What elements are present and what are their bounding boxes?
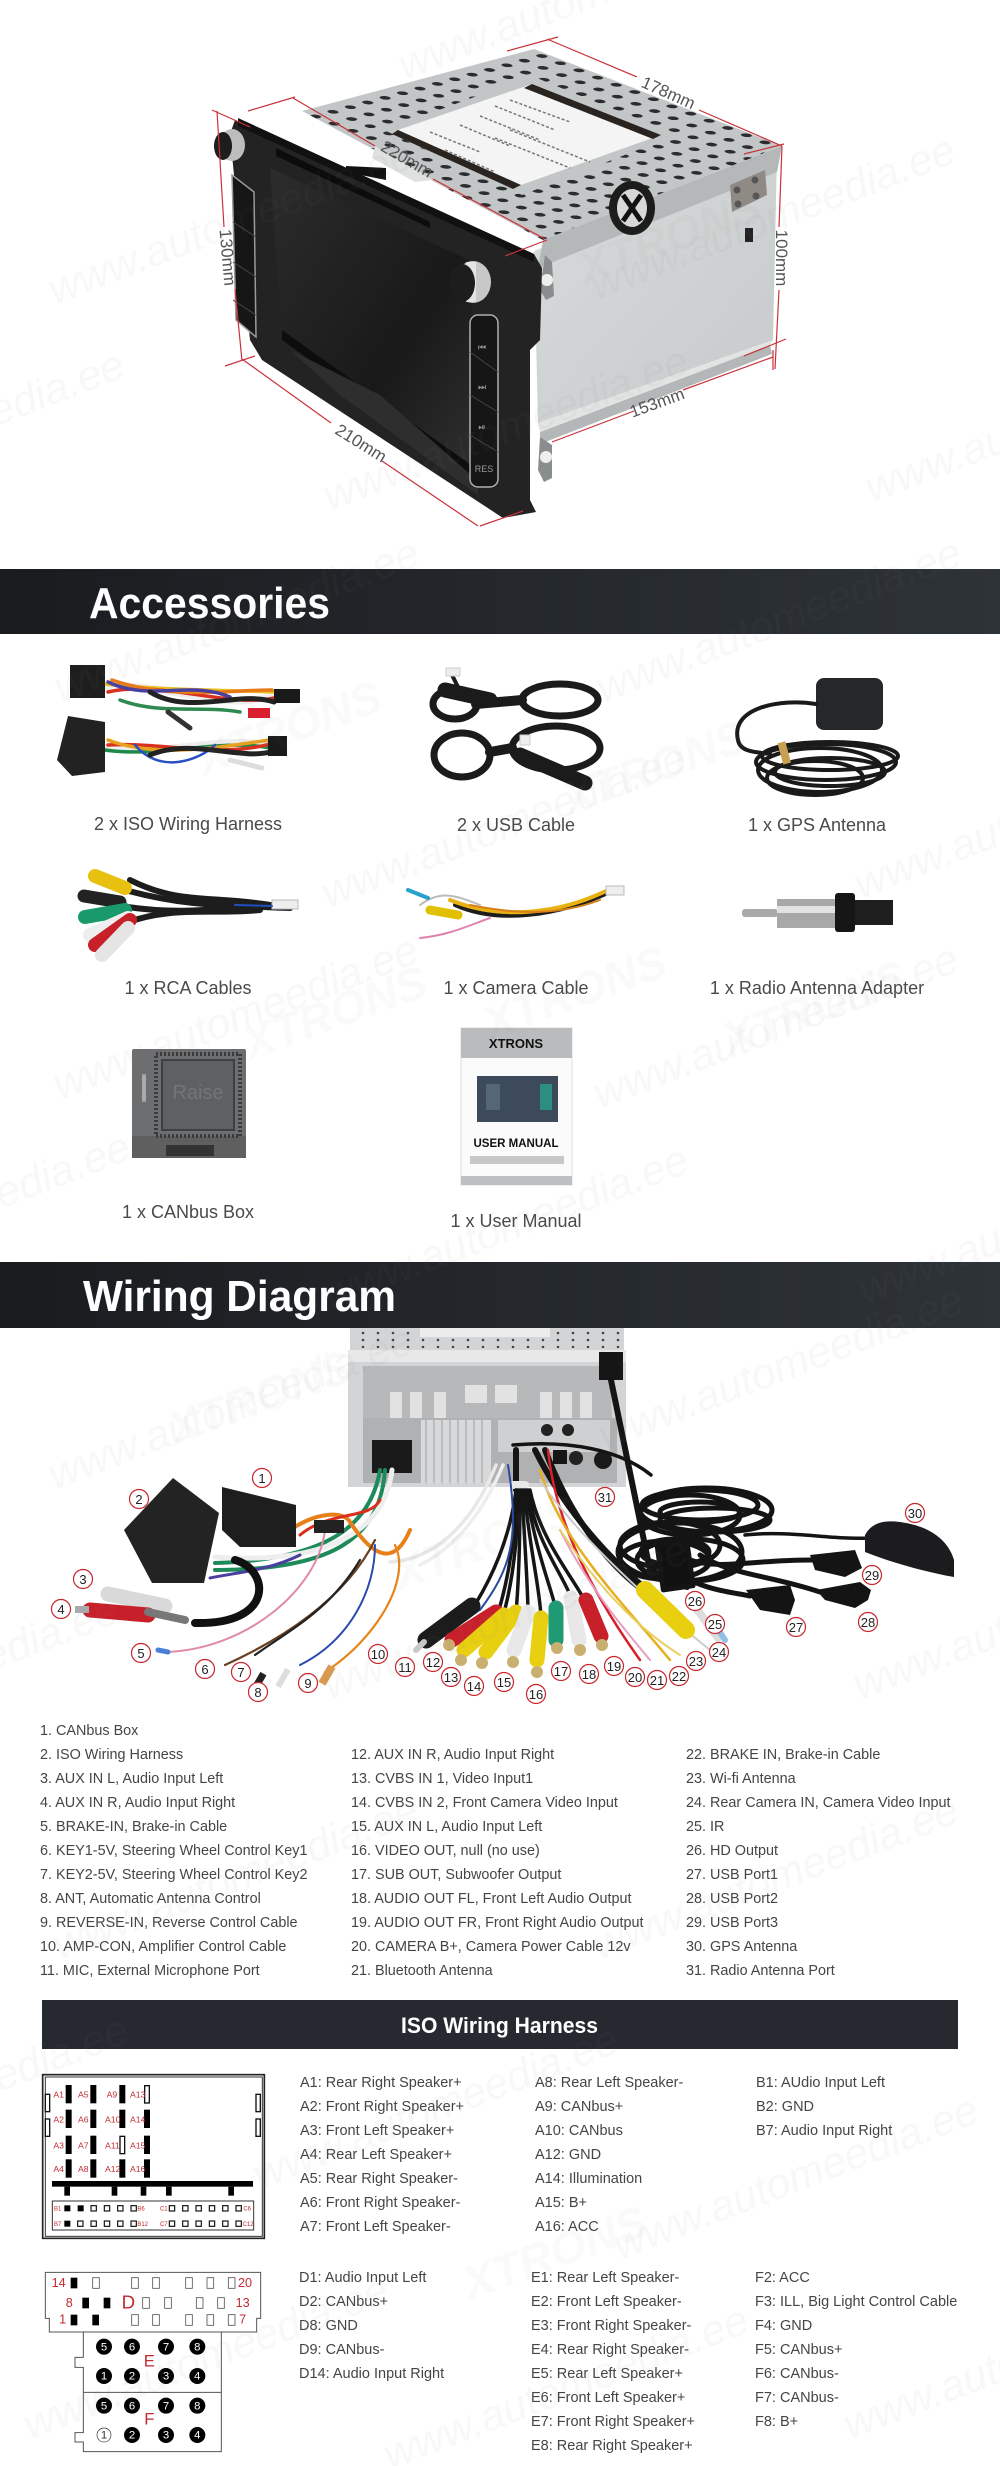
device side panel <box>534 146 782 482</box>
connector diagram: A B C: B1 <box>54 2207 62 2213</box>
item: ISO wiring harness <box>57 665 300 776</box>
legend column 1: 1. CANbus Box <box>40 1723 139 1739</box>
legend column 2: 16. VIDEO OUT, null (no use) <box>351 1843 540 1859</box>
pin list: F: F6: CANbus- <box>755 2366 839 2382</box>
XTRONS watermarks: XTRONS <box>453 2195 654 2310</box>
legend column 2: 12. AUX IN R, Audio Input Right <box>351 1747 554 1763</box>
legend column 2: 13. CVBS IN 1, Video Input1 <box>351 1771 533 1787</box>
connector diagram: A B C: A16 <box>130 2164 146 2174</box>
legend column 3: 22. BRAKE IN, Brake-in Cable <box>686 1747 880 1763</box>
pin list: B: B7: Audio Input Right <box>756 2123 892 2139</box>
connector diagram: D E F: 4 <box>194 2371 200 2383</box>
pin list: A1-A7: A6: Front Right Speaker- <box>300 2195 461 2211</box>
connector diagram: D E F: 3 <box>163 2371 169 2383</box>
pin list: E: E1: Rear Left Speaker- <box>531 2270 679 2286</box>
legend column 2: 19. AUDIO OUT FR, Front Right Audio Output <box>351 1915 643 1931</box>
callout numbers: 31 <box>598 1490 612 1505</box>
connector diagram: D E F: 20 <box>238 2276 252 2290</box>
legend column 1 <box>40 1723 307 1979</box>
wiring photo: RCA plugs <box>416 1590 725 1678</box>
XTRONS watermarks <box>158 180 914 2310</box>
pin list: A1-A7: A5: Rear Right Speaker- <box>300 2171 458 2187</box>
legend column 1: 8. ANT, Automatic Antenna Control <box>40 1891 261 1907</box>
item: CANbus box: Raise <box>172 1082 224 1104</box>
item: GPS antenna <box>737 678 898 795</box>
connector diagram: A B C: A6 <box>78 2115 89 2125</box>
connector diagram: A B C: A4 <box>53 2164 64 2174</box>
legend column 2: 14. CVBS IN 2, Front Camera Video Input <box>351 1795 618 1811</box>
connector diagram: D E F: 13 <box>236 2296 250 2310</box>
callout numbers: 20 <box>628 1670 642 1685</box>
dimension labels: 153mm <box>627 384 687 421</box>
connector diagram: A B C: C12 <box>243 2222 254 2228</box>
watermarks: www.automeedia.ee <box>246 2016 625 2199</box>
watermarks: www.automeedia.ee <box>606 2086 985 2269</box>
legend column 3: 26. HD Output <box>686 1843 778 1859</box>
hinge bracket <box>730 170 767 212</box>
connector diagram: A B C: A7 <box>78 2141 89 2151</box>
pin list: F: F7: CANbus- <box>755 2390 839 2406</box>
pin list: B: B1: AUdio Input Left <box>756 2075 885 2091</box>
legend column 3: 27. USB Port1 <box>686 1867 778 1883</box>
legend column 3: 23. Wi-fi Antenna <box>686 1771 796 1787</box>
XTRONS watermarks: XTRONS <box>158 1340 359 1455</box>
pin list: D: D8: GND <box>299 2318 358 2334</box>
connector diagram: D E F: F <box>144 2409 154 2428</box>
wiring photo: head unit rear <box>348 1328 626 1487</box>
callout numbers: 3 <box>79 1572 87 1587</box>
pin list: E <box>531 2270 695 2454</box>
watermarks: www.automeedia.ee <box>46 1786 425 1969</box>
pin list: A8-A16: A8: Rear Left Speaker- <box>535 2075 683 2091</box>
pin list: A1-A7 <box>300 2075 464 2235</box>
right buttons: ⏭ <box>478 382 486 392</box>
callout numbers: 14 <box>467 1679 481 1694</box>
connector diagram: D E F: 3 <box>163 2430 169 2442</box>
connector diagram: D E F: 6 <box>129 2400 135 2412</box>
connector diagram: D E F: 14 <box>52 2276 66 2290</box>
connector diagram: A B C: A1 <box>53 2090 64 2100</box>
callout numbers: 18 <box>582 1667 596 1682</box>
connector diagram: A B C: A2 <box>53 2115 64 2125</box>
connector diagram: A B C: C6 <box>243 2207 252 2213</box>
connector diagram: D E F: 8 <box>194 2341 200 2353</box>
right buttons: RES <box>475 464 493 474</box>
pin list: A1-A7: A1: Rear Right Speaker+ <box>300 2075 462 2091</box>
pin list: F: F4: GND <box>755 2318 812 2334</box>
connector diagram: D E F: 6 <box>129 2341 135 2353</box>
connector diagram: A B C: A15 <box>130 2141 146 2151</box>
badge: X logo <box>609 181 655 235</box>
connector diagram: D E F: 1 <box>59 2313 66 2327</box>
callout numbers: 23 <box>689 1654 703 1669</box>
XTRONS watermarks: XTRONS <box>568 180 769 295</box>
caption: 1 x GPS Antenna <box>748 815 887 835</box>
legend column 1: 4. AUX IN R, Audio Input Right <box>40 1795 235 1811</box>
pin list: D: D1: Audio Input Left <box>299 2270 426 2286</box>
pin list: A8-A16: A14: Illumination <box>535 2171 642 2187</box>
legend column 1: 10. AMP-CON, Amplifier Control Cable <box>40 1939 286 1955</box>
callout numbers: 6 <box>201 1662 209 1677</box>
pin list: B: B2: GND <box>756 2099 814 2115</box>
XTRONS watermarks: XTRONS <box>188 670 389 785</box>
callout numbers: 12 <box>426 1655 440 1670</box>
pin list: A8-A16: A12: GND <box>535 2147 601 2163</box>
XTRONS watermarks: XTRONS <box>713 950 914 1065</box>
connector diagram: D E F: 5 <box>101 2341 107 2353</box>
connector diagram: A B C: A3 <box>53 2141 64 2151</box>
callout numbers: 19 <box>607 1659 621 1674</box>
dimension labels <box>216 73 791 466</box>
caption: 2 x ISO Wiring Harness <box>94 814 282 834</box>
dimension labels: 220mm <box>377 137 436 182</box>
connector diagram: A B C: A11 <box>105 2141 120 2151</box>
connector diagram: A B C: B7 <box>54 2222 62 2228</box>
knobs <box>214 129 245 161</box>
legend column 1: 11. MIC, External Microphone Port <box>40 1963 260 1979</box>
connector diagram: A B C: A13 <box>130 2090 146 2100</box>
dimension labels: 130mm <box>216 228 239 287</box>
legend column 3: 30. GPS Antenna <box>686 1939 797 1955</box>
item: RCA cables <box>84 876 298 955</box>
legend column 1: 6. KEY1-5V, Steering Wheel Control Key1 <box>40 1843 307 1859</box>
connector diagram: D E F: 7 <box>239 2313 246 2327</box>
connector diagram: A B C: A10 <box>105 2115 121 2125</box>
dimension lines <box>212 37 786 526</box>
pin list: E: E5: Rear Left Speaker+ <box>531 2366 683 2382</box>
callout numbers: 21 <box>650 1673 664 1688</box>
connector diagram: D E F: 7 <box>163 2400 169 2412</box>
caption: 2 x USB Cable <box>457 815 575 835</box>
pin list: F <box>755 2270 957 2430</box>
connector diagram: A B C: A8 <box>78 2164 89 2174</box>
heading bar: ISO Wiring Harness <box>42 2000 958 2049</box>
connector diagram: A B C: A12 <box>105 2164 121 2174</box>
dimension labels: 178mm <box>638 73 698 113</box>
pin list: D: D14: Audio Input Right <box>299 2366 444 2382</box>
callout numbers: 2 <box>135 1492 143 1507</box>
pin list: B <box>756 2075 892 2139</box>
pin list: A8-A16: A16: ACC <box>535 2219 599 2235</box>
pin list: A1-A7: A7: Front Left Speaker- <box>300 2219 451 2235</box>
device top metal plate <box>302 49 782 240</box>
watermarks: www.automeedia.ee <box>16 2266 395 2449</box>
heading bar: ISO Wiring Harness: ISO Wiring Harness <box>401 2013 598 2038</box>
pin list: A1-A7: A2: Front Right Speaker+ <box>300 2099 464 2115</box>
right buttons: ⏮ <box>478 342 486 352</box>
connector diagram: A B C <box>43 2075 264 2238</box>
legend column 2: 20. CAMERA B+, Camera Power Cable 12v <box>351 1939 631 1955</box>
pin list: E: E7: Front Right Speaker+ <box>531 2414 695 2430</box>
connector diagram: D E F: 4 <box>194 2430 200 2442</box>
pin list: A8-A16: A15: B+ <box>535 2195 587 2211</box>
watermarks: www.automeedia.ee <box>316 1136 695 1319</box>
connector diagram: D E F: 8 <box>194 2400 200 2412</box>
device front bezel <box>214 118 542 518</box>
legend column 3: 28. USB Port2 <box>686 1891 778 1907</box>
connector diagram: A B C: C7 <box>160 2222 168 2228</box>
connector diagram: D E F: 7 <box>163 2341 169 2353</box>
pin list: D: D9: CANbus- <box>299 2342 385 2358</box>
left buttons <box>232 175 256 337</box>
callout numbers: 26 <box>688 1594 702 1609</box>
callout numbers: 22 <box>672 1669 686 1684</box>
watermarks: www.automeedia.ee <box>41 1316 420 1499</box>
watermarks: www.automeedia.ee <box>316 1526 695 1709</box>
callout numbers: 27 <box>789 1620 803 1635</box>
watermarks: www.automeedia.ee <box>46 926 425 1109</box>
caption: 1 x CANbus Box <box>122 1202 254 1222</box>
XTRONS watermarks: XTRONS <box>383 1485 584 1600</box>
callout numbers: 4 <box>57 1602 65 1617</box>
legend column 1: 7. KEY2-5V, Steering Wheel Control Key2 <box>40 1867 307 1883</box>
item: CANbus box <box>132 1049 246 1158</box>
watermarks: www.automeedia.ee <box>586 935 965 1118</box>
XTRONS watermarks: XTRONS <box>553 710 754 825</box>
connector diagram: A B C: A14 <box>130 2115 146 2125</box>
callout numbers: 16 <box>529 1687 543 1702</box>
pin list: D: D2: CANbus+ <box>299 2294 388 2310</box>
pin list: E: E2: Front Left Speaker- <box>531 2294 682 2310</box>
callout numbers: 7 <box>237 1665 245 1680</box>
legend column 1: 2. ISO Wiring Harness <box>40 1747 183 1763</box>
connector diagram: D E F: D <box>122 2291 135 2312</box>
wiring photo: left harness and connectors <box>75 1470 410 1693</box>
connector diagram: A B C: A5 <box>78 2090 89 2100</box>
watermarks: www.automeedia.ee <box>589 529 968 712</box>
watermarks: www.automeedia.ee <box>314 734 693 917</box>
callout numbers: 17 <box>554 1664 568 1679</box>
connector diagram: A B C: B6 <box>137 2207 145 2213</box>
item: user manual <box>461 1028 572 1185</box>
legend column 2: 18. AUDIO OUT FL, Front Left Audio Output <box>351 1891 631 1907</box>
dimension labels: 100mm <box>772 230 791 286</box>
pin list: A1-A7: A3: Front Left Speaker+ <box>300 2123 454 2139</box>
caption: 1 x Radio Antenna Adapter <box>710 978 924 998</box>
wiring photo: cable coils <box>513 1380 870 1596</box>
wiring photo: USB plugs and GPS antenna <box>746 1521 954 1615</box>
right buttons: ⏯ <box>478 422 486 432</box>
pin list: F: F2: ACC <box>755 2270 810 2286</box>
callout numbers: 25 <box>708 1617 722 1632</box>
heading bar: Wiring Diagram <box>0 1262 1000 1328</box>
pin list: A1-A7: A4: Rear Left Speaker+ <box>300 2147 452 2163</box>
dimension labels: 210mm <box>332 420 390 466</box>
legend column 2: 15. AUX IN L, Audio Input Left <box>351 1819 542 1835</box>
pin list: A8-A16: A9: CANbus+ <box>535 2099 623 2115</box>
photo: car stereo with dimensions <box>212 37 791 526</box>
callout numbers: 15 <box>497 1675 511 1690</box>
legend column 2 <box>351 1747 643 1979</box>
callout numbers <box>52 1468 924 1704</box>
pin list: F: F3: ILL, Big Light Control Cable <box>755 2294 957 2310</box>
callout numbers: 10 <box>371 1647 385 1662</box>
connector diagram: D E F: 1 <box>101 2371 107 2383</box>
XTRONS watermarks: XTRONS <box>473 935 674 1050</box>
item: radio antenna adapter <box>742 893 893 932</box>
pin list: E: E3: Front Right Speaker- <box>531 2318 692 2334</box>
heading bar: Wiring Diagram: Wiring Diagram <box>83 1272 396 1321</box>
legend column 2: 17. SUB OUT, Subwoofer Output <box>351 1867 561 1883</box>
watermarks: www.automeedia.ee <box>586 1786 965 1969</box>
pin list: E: E8: Rear Right Speaker+ <box>531 2438 693 2454</box>
connector diagram: A B C: A9 <box>107 2090 117 2100</box>
pin list: F: F8: B+ <box>755 2414 798 2430</box>
pin list: A8-A16: A10: CANbus <box>535 2123 623 2139</box>
watermarks: www.automeedia.ee <box>41 131 420 314</box>
callout numbers: 1 <box>258 1471 266 1486</box>
legend column 1: 5. BRAKE-IN, Brake-in Cable <box>40 1819 227 1835</box>
item: user manual: USER MANUAL <box>474 1138 558 1150</box>
item: camera cable <box>408 886 624 938</box>
wiring photo: center cables fan <box>390 1450 710 1660</box>
connector diagram: A B C: C1 <box>160 2207 168 2213</box>
watermarks: www.automeedia.ee <box>47 529 426 712</box>
connector diagram: D E F: 8 <box>66 2296 73 2310</box>
pin list: A8-A16 <box>535 2075 683 2235</box>
caption: 1 x User Manual <box>450 1211 582 1231</box>
pin list: F: F5: CANbus+ <box>755 2342 842 2358</box>
legend column 3: 31. Radio Antenna Port <box>686 1963 835 1979</box>
heading bar: Accessories <box>0 569 1000 634</box>
callout numbers: 9 <box>304 1676 312 1691</box>
callout numbers: 24 <box>712 1645 726 1660</box>
callout numbers: 11 <box>398 1660 412 1675</box>
connector diagram: D E F: 2 <box>129 2371 135 2383</box>
pin list: D <box>299 2270 444 2382</box>
connector diagram: A B C: B12 <box>137 2222 149 2228</box>
connector diagram: D E F: 5 <box>101 2400 107 2412</box>
item: USB cables <box>433 668 600 783</box>
caption: 1 x RCA Cables <box>124 978 252 998</box>
watermarks: www.automeedia.ee <box>583 126 962 309</box>
connector diagram: D E F: 2 <box>129 2430 135 2442</box>
heading bar: Accessories: Accessories <box>89 579 330 628</box>
callout numbers: 28 <box>861 1615 875 1630</box>
pin list: E: E4: Rear Right Speaker- <box>531 2342 689 2358</box>
caption: 1 x Camera Cable <box>443 978 589 998</box>
legend column 1: 3. AUX IN L, Audio Input Left <box>40 1771 223 1787</box>
connector diagram: D E F <box>45 2272 261 2452</box>
item: user manual: XTRONS <box>489 1036 543 1051</box>
connector diagram: D E F: 1 <box>101 2430 107 2442</box>
callout numbers: 5 <box>137 1646 145 1661</box>
callout numbers: 30 <box>908 1506 922 1521</box>
legend column 3 <box>686 1747 950 1979</box>
pin list: E: E6: Front Left Speaker+ <box>531 2390 685 2406</box>
watermarks: www.automeedia.ee <box>316 337 695 520</box>
callout numbers: 13 <box>444 1670 458 1685</box>
right buttons <box>470 315 498 487</box>
legend column 2: 21. Bluetooth Antenna <box>351 1963 493 1979</box>
legend column 3: 24. Rear Camera IN, Camera Video Input <box>686 1795 950 1811</box>
watermarks: www.automeedia.ee <box>591 1276 970 1459</box>
XTRONS watermarks: XTRONS <box>233 955 434 1070</box>
legend column 1: 9. REVERSE-IN, Reverse Control Cable <box>40 1915 298 1931</box>
callout numbers: 8 <box>254 1685 262 1700</box>
connector diagram: D E F: E <box>144 2352 155 2371</box>
callout numbers: 29 <box>865 1568 879 1583</box>
legend column 3: 29. USB Port3 <box>686 1915 778 1931</box>
legend column 3: 25. IR <box>686 1819 724 1835</box>
